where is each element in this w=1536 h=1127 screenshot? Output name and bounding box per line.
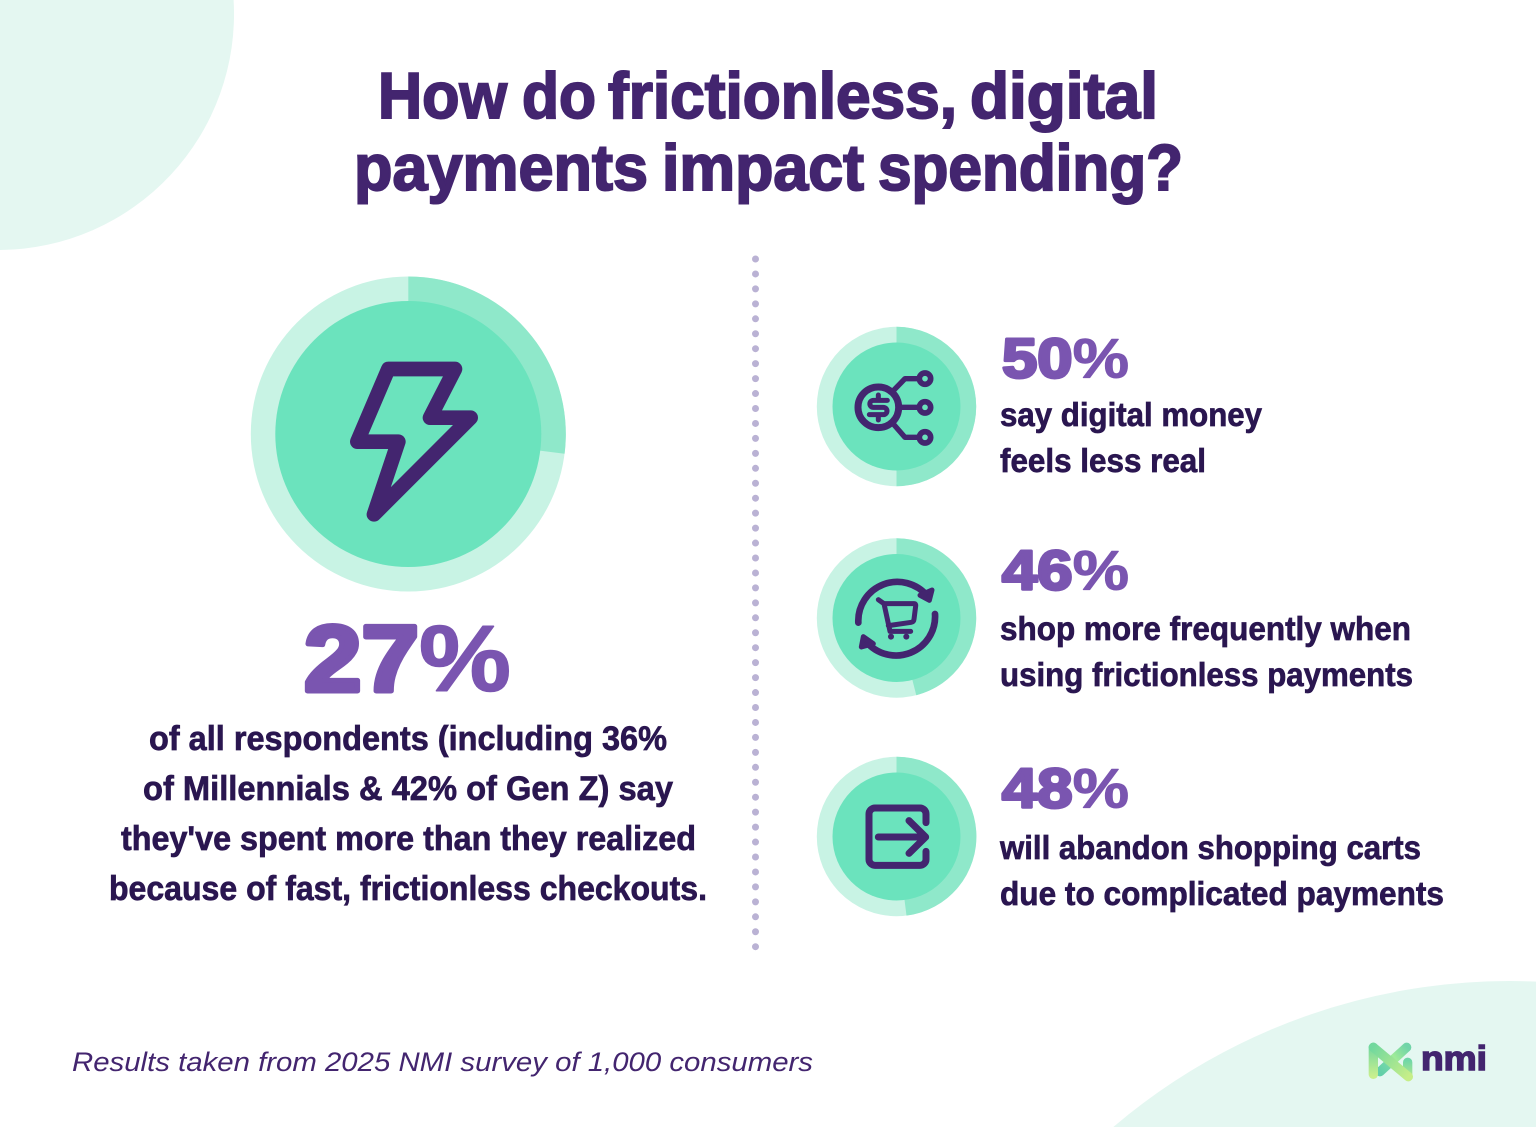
title: spending? [878, 131, 1183, 204]
title: do [522, 59, 596, 132]
percentage 46%: 46% [1002, 538, 1129, 602]
logo wordmark: nmi [1421, 1040, 1487, 1078]
big number 27%: 27% [304, 606, 511, 711]
donut chart: 27% with lightning icon [251, 276, 566, 592]
decorative corner shape: bottom right [1113, 981, 1536, 1127]
description [1000, 397, 1262, 480]
donut chart: 50% with money network icon [817, 327, 976, 486]
description text: they've spent more than they realized [121, 820, 696, 858]
description text: of Millennials & 42% of Gen Z) say [143, 770, 673, 808]
description [999, 830, 1444, 913]
description [1000, 611, 1413, 694]
donut chart: 48% with exit arrow icon [817, 757, 976, 916]
panel: 48% stat [817, 756, 1444, 916]
description: shop more frequently when [1000, 611, 1411, 648]
title: impact [662, 131, 864, 204]
description text: of all respondents (including 36% [149, 720, 667, 758]
footnote: Results taken from 2025 NMI survey of 1,000 consumers [72, 1047, 813, 1077]
panel: main statistic 27% [109, 276, 707, 908]
description text [109, 720, 707, 908]
panel: 50% stat [817, 326, 1262, 486]
description: using frictionless payments [1000, 657, 1413, 694]
description: feels less real [1000, 443, 1206, 480]
panel: 46% stat [817, 538, 1413, 698]
title: How [378, 59, 507, 132]
donut chart: 46% with shopping cart icon [817, 538, 976, 698]
title: payments [354, 131, 648, 204]
title: frictionless, [608, 59, 957, 132]
description text: because of fast, frictionless checkouts. [109, 870, 707, 908]
dotted divider [752, 259, 759, 948]
description: say digital money [1000, 397, 1262, 434]
percentage 50%: 50% [1002, 326, 1129, 390]
description: will abandon shopping carts [999, 830, 1421, 867]
title [354, 59, 1183, 204]
decorative corner shape: top left [0, 0, 234, 250]
title: digital [970, 59, 1158, 132]
description: due to complicated payments [1000, 876, 1444, 913]
logo mark [1373, 1047, 1408, 1077]
logo: nmi [1373, 1040, 1487, 1078]
percentage 48%: 48% [1002, 756, 1129, 820]
